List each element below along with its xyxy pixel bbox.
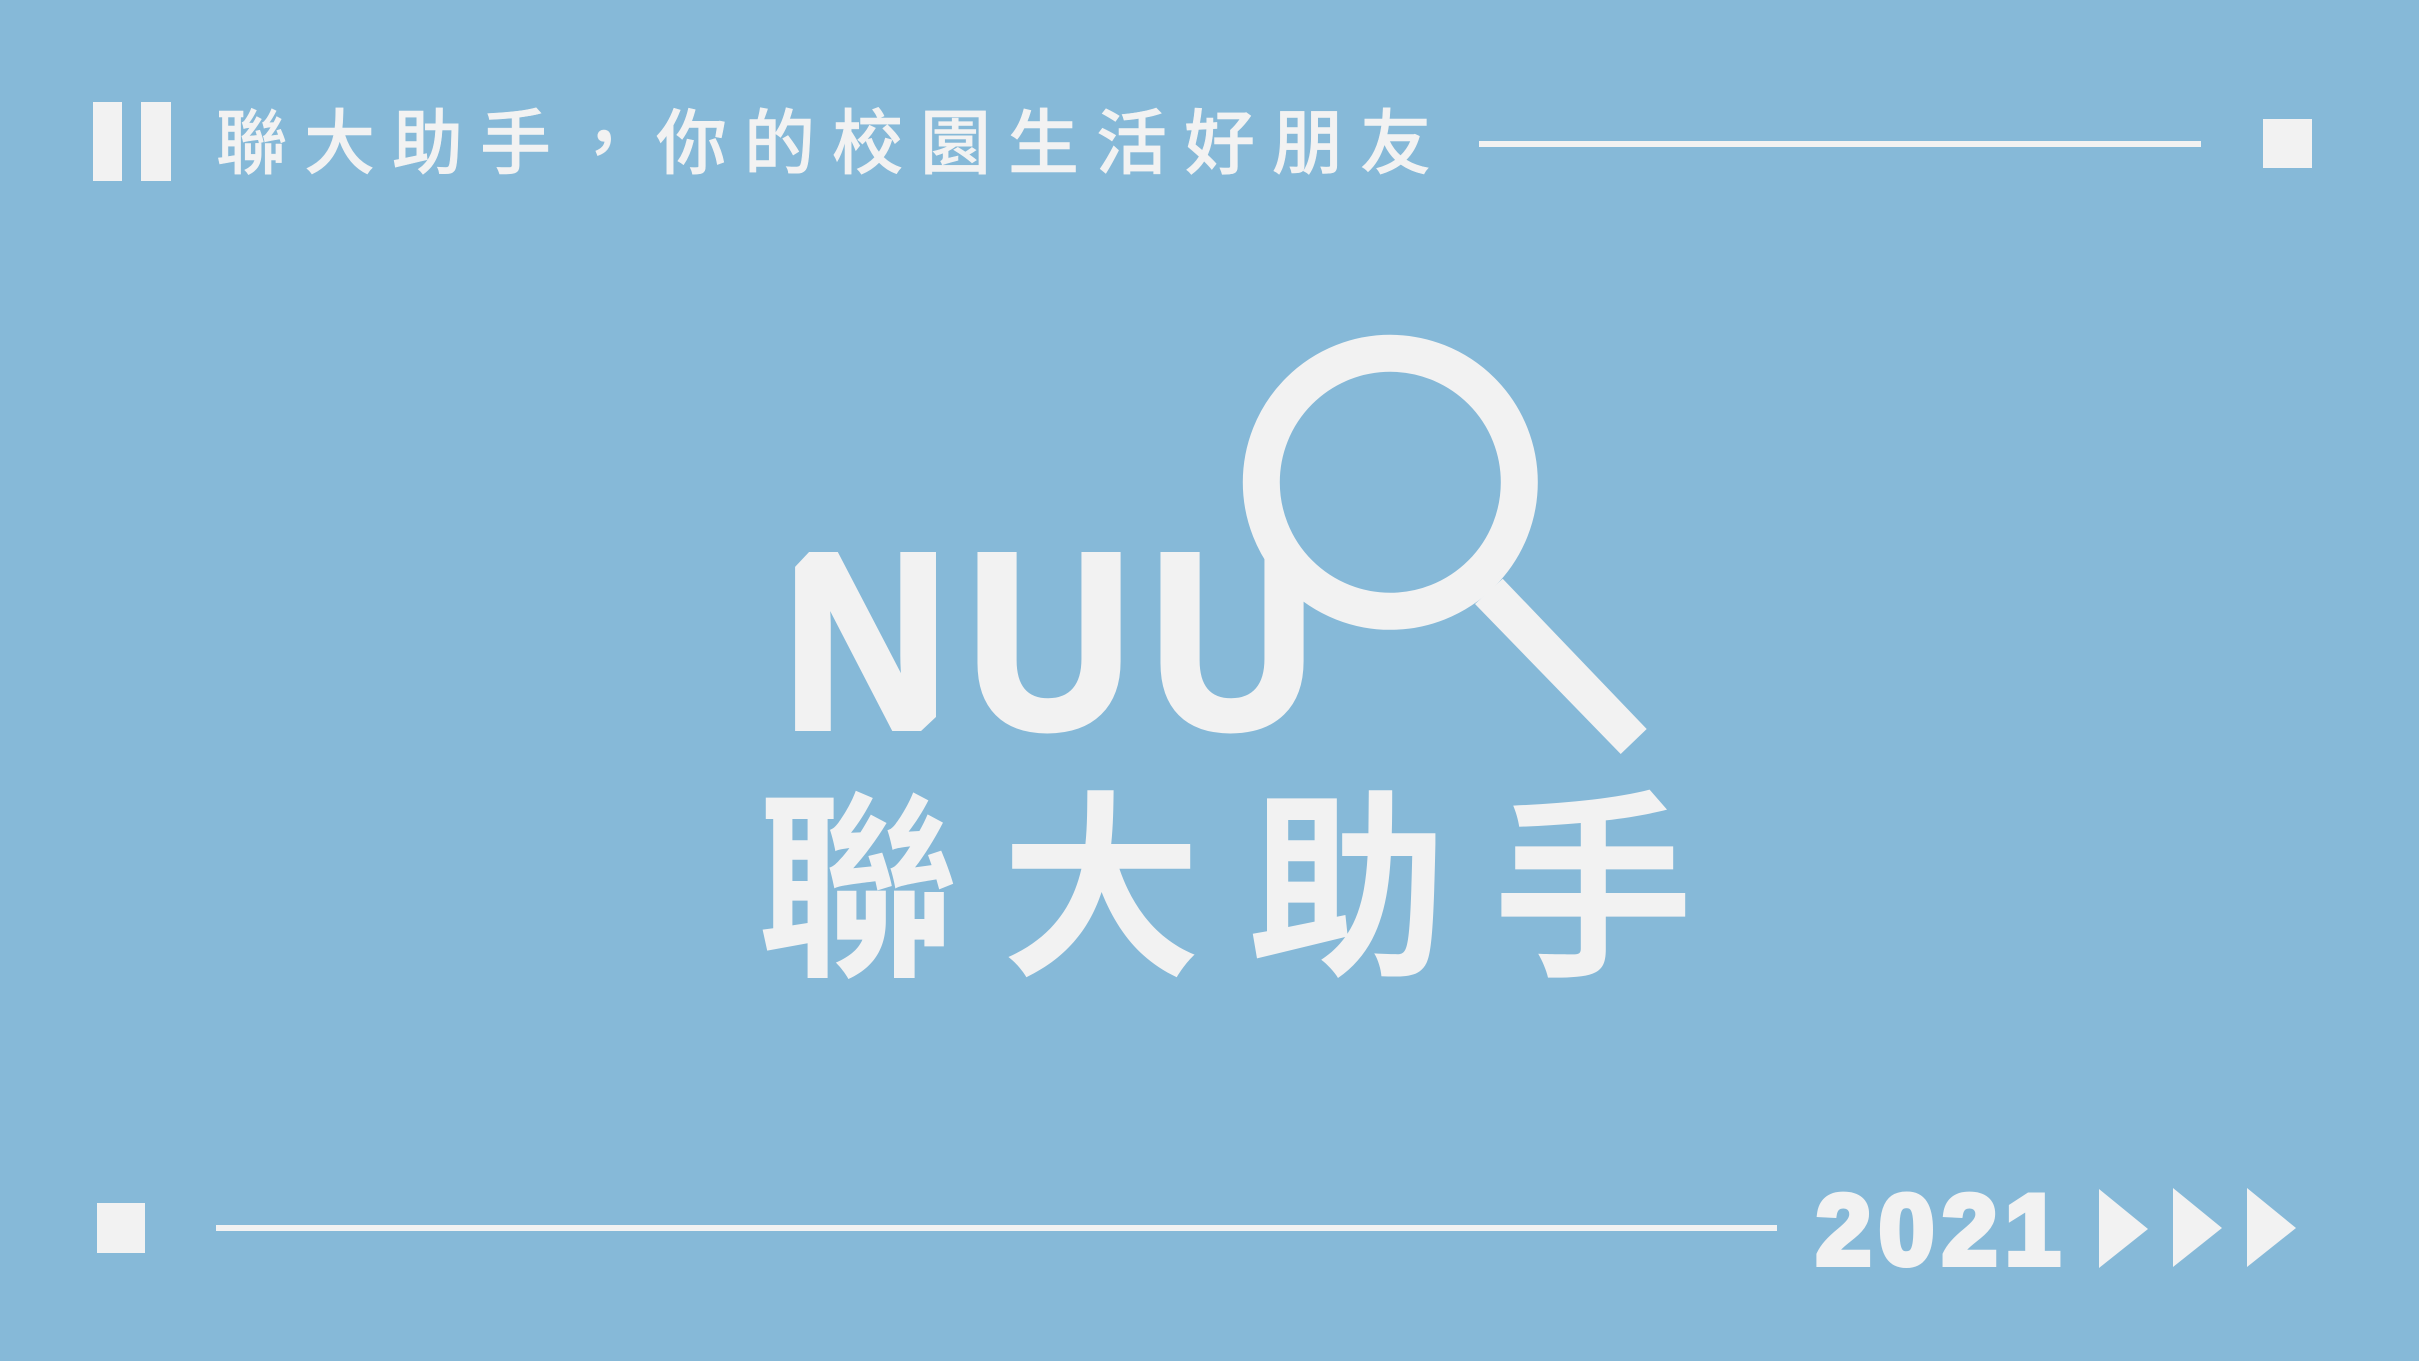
top rule (1479, 141, 2201, 147)
bottom rule (216, 1225, 1777, 1231)
icon: top right square (2263, 119, 2312, 168)
icon: double bar marker (93, 102, 171, 181)
bottom left square (97, 1203, 145, 1253)
logo word: NUU: N (783, 501, 948, 781)
logo word: NUU: U (1150, 502, 1314, 781)
subtitle text: 聯大助手，你的校園生活好朋友 (216, 105, 1431, 184)
year: 2021 (1816, 1174, 2068, 1285)
icon: magnifying glass (1261, 353, 1647, 754)
icon: triple arrows (2099, 1188, 2296, 1268)
main title: 聯大助手 (757, 780, 1693, 1003)
logo word: NUU: U (967, 502, 1131, 781)
logo word: NUU (783, 501, 1314, 781)
